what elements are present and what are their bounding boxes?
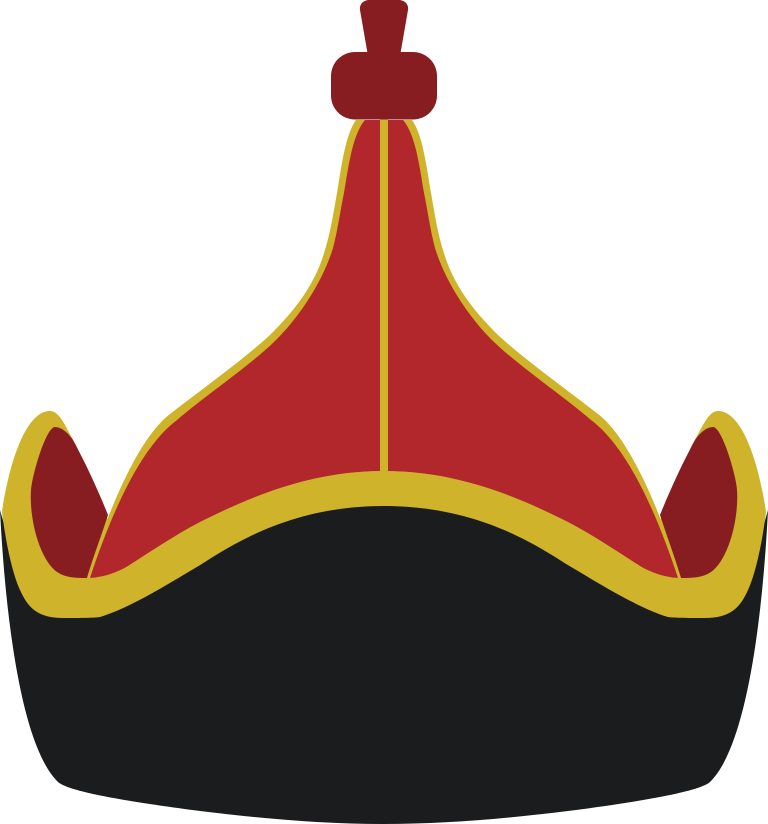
- brim and ear flaps: gold band: [2, 411, 766, 618]
- right ear flap lining: [660, 427, 737, 578]
- crown: gold outline: [87, 120, 681, 578]
- crown: red fabric: [90, 120, 678, 578]
- finial stem: [360, 0, 408, 56]
- centre seam: [380, 118, 388, 472]
- finial knob: [331, 52, 437, 120]
- brim: black base: [0, 496, 768, 824]
- left ear flap lining: [31, 427, 108, 578]
